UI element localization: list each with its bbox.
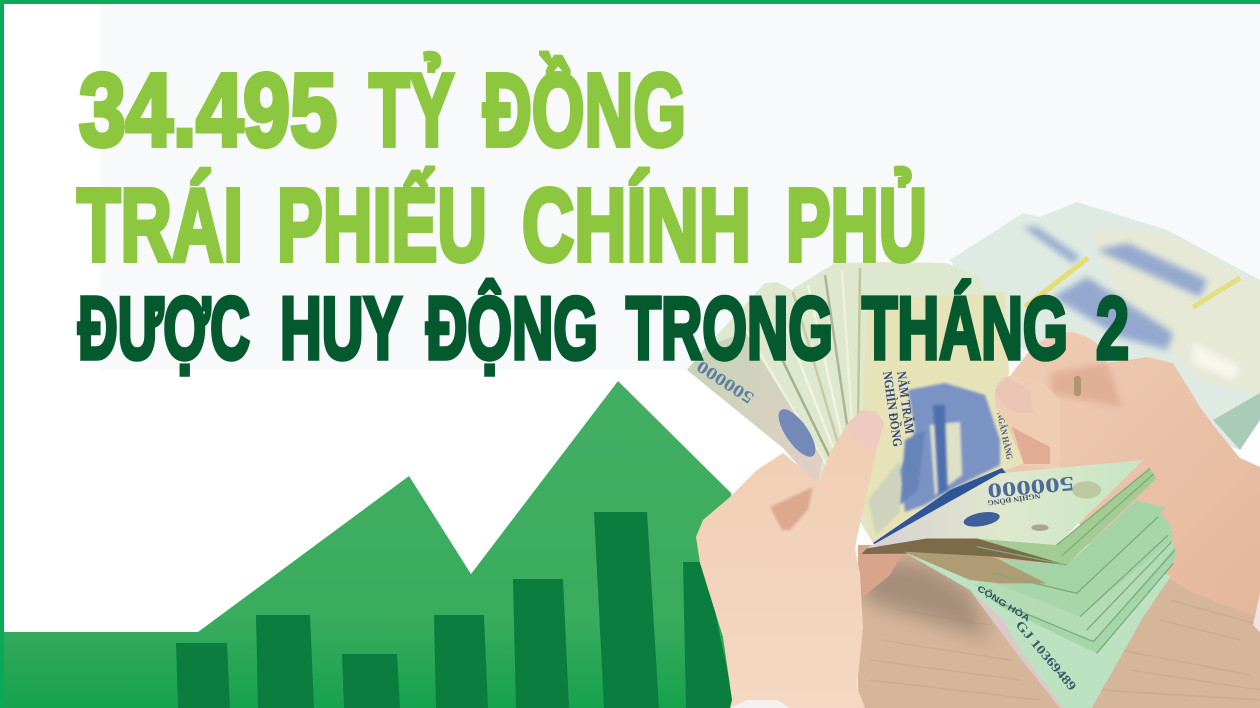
- note denomination text: NĂM TRĂM: [894, 370, 918, 435]
- seal: [962, 510, 1001, 529]
- note hole: [1031, 524, 1049, 531]
- circular watermark: [772, 404, 822, 462]
- bar 1: [176, 643, 230, 708]
- edge of stacked notes: [1213, 393, 1260, 450]
- title: [77, 52, 1129, 378]
- shadow between fingers: [1050, 363, 1122, 407]
- wooden table: [858, 545, 1260, 708]
- yellow paper bands: [1025, 258, 1088, 307]
- leftmost note: [687, 332, 823, 487]
- lower stack of banknotes: [862, 460, 1175, 708]
- wooden bar chart: [176, 512, 735, 708]
- title line 3: [78, 278, 1129, 378]
- note issuer: CỘNG HÒA: [976, 582, 1033, 624]
- bar 6: [594, 512, 659, 708]
- left hand: [696, 410, 884, 708]
- blurred stack of banknotes in background: [950, 202, 1260, 450]
- fanned note edges: [740, 268, 860, 475]
- central banknote: [858, 293, 1024, 543]
- note small caption: NGHÌN ĐỒNG: [987, 491, 1041, 509]
- top note: [867, 460, 1143, 548]
- rosette: [1072, 481, 1101, 499]
- bar 7: [683, 562, 735, 708]
- fan of banknotes: NGÂN HÀNG: [995, 411, 1015, 460]
- right thumbnail: [995, 377, 1033, 413]
- temple engraving: [868, 383, 1000, 535]
- serial number: GJ 10369489: [1013, 618, 1079, 693]
- title line 2: TRÁI: [77, 168, 243, 282]
- left hand underside: [858, 545, 905, 597]
- wedding ring: [1074, 376, 1081, 396]
- title line 3: ĐỘNG: [426, 278, 598, 378]
- lower fingers: [1012, 427, 1050, 464]
- crease between finger and thumb: [770, 487, 813, 530]
- bar 4: [434, 615, 488, 708]
- left thumbnail: [848, 410, 884, 450]
- bar 2: [256, 615, 314, 708]
- note value: 500000: [987, 472, 1075, 501]
- leftmost note value: 500000: [693, 357, 757, 408]
- fan of banknotes: NGHÌN ĐỒNG: [880, 370, 905, 448]
- left sleeve: [730, 700, 790, 708]
- title line 2: CHÍNH: [522, 168, 751, 282]
- title line 1: TỶ: [369, 52, 454, 168]
- title line 3: THÁNG: [862, 278, 1068, 378]
- blue shaded fold: [873, 468, 1006, 548]
- right thumb over the note: [995, 376, 1060, 470]
- title line 3: 2: [1096, 278, 1129, 378]
- brown note edges: [862, 538, 1067, 565]
- title line 2: [77, 166, 927, 282]
- title line 1: [79, 52, 686, 168]
- title line 1: 34.495: [79, 52, 337, 168]
- right hand: [985, 332, 1260, 617]
- green paper mountain chart backdrop: [4, 381, 735, 708]
- title line 2: PHIẾU: [277, 168, 487, 282]
- title line 2: PHỦ: [786, 166, 927, 282]
- right sleeve: [1253, 593, 1260, 632]
- title line 3: HUY: [280, 278, 402, 378]
- title line 1: ĐỒNG: [483, 52, 686, 168]
- fan of banknotes: [687, 262, 1024, 548]
- bar 3: [342, 654, 400, 708]
- title line 3: ĐƯỢC: [78, 278, 250, 378]
- bar 5: [513, 579, 569, 708]
- title line 3: TRONG: [626, 278, 833, 378]
- note layer lines: [977, 468, 1175, 653]
- photo: hands counting money: [687, 202, 1260, 708]
